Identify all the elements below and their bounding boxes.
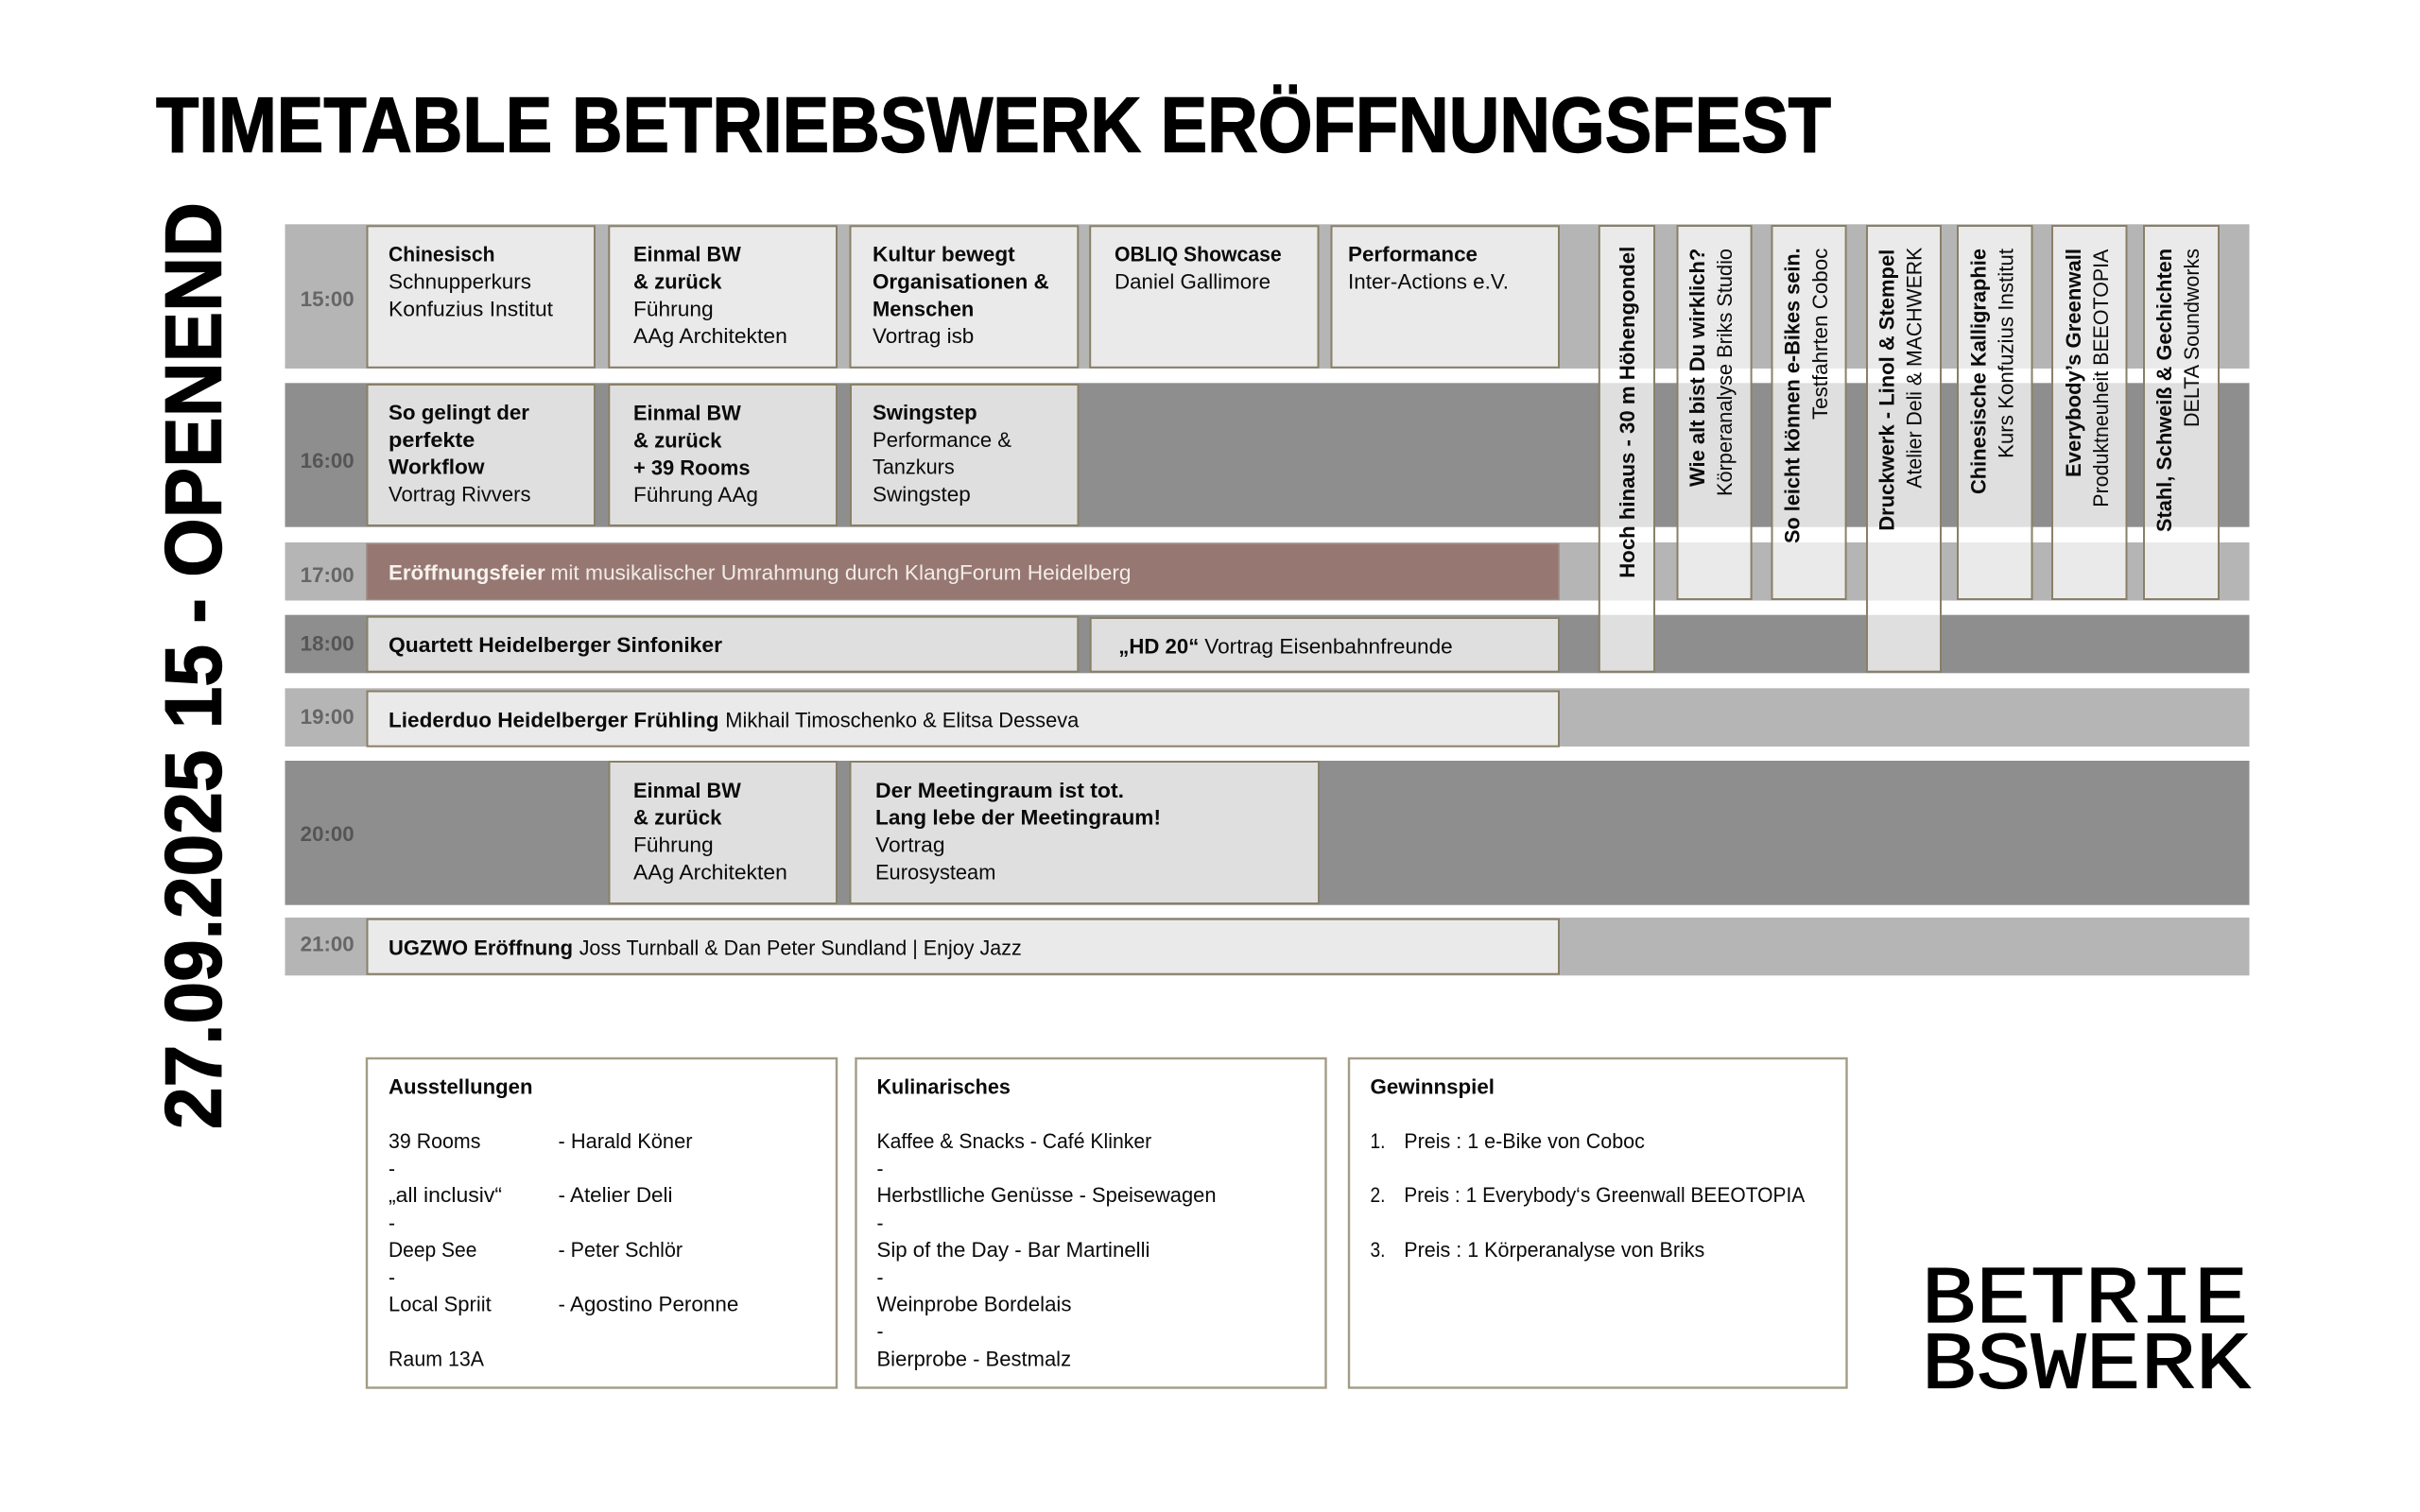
band 17:00 [285, 542, 2250, 601]
row: 17:00 [285, 542, 2250, 601]
card: Einmal BW: Führung [633, 297, 714, 320]
card: Kultur bewegt: Menschen [873, 297, 974, 320]
card: Eröffnungsfeier: mit musikalischer Umrahmung durch KlangForum Heidelberg [550, 560, 1131, 584]
exhibition list: 39 Rooms [389, 1129, 480, 1153]
card: Swingstep [851, 385, 1078, 525]
prize list: 3. [1371, 1238, 1386, 1262]
column: Stahl, Schweiß & Gechichten: Stahl, Schweiß & Gechichten [2152, 249, 2176, 532]
column: Chinesische Kalligraphie: Chinesische Kalligraphie [1966, 249, 1991, 494]
card: Einmal BW + 39 Rooms: + 39 Rooms [633, 455, 751, 479]
panel: Kulinarisches [856, 1058, 1325, 1387]
card: OBLIQ Showcase: Daniel Gallimore [1115, 270, 1270, 294]
column: Hoch hinaus [1599, 226, 1654, 672]
column: Druckwerk: Druckwerk - Linol & Stempel [1876, 249, 1899, 531]
column: So leicht können e-Bikes sein: So leicht können e-Bikes sein. [1781, 248, 1805, 543]
culinary list: - [877, 1157, 883, 1180]
card: So gelingt der perfekte Workflow [367, 385, 595, 525]
exhibition list: - Atelier Deli [558, 1183, 673, 1207]
band 18:00 [285, 615, 2250, 673]
band 15:00 [285, 224, 2250, 369]
card: Einmal BW: AAg Architekten [633, 324, 787, 348]
culinary list: Weinprobe Bordelais [877, 1292, 1072, 1315]
card: Einmal BW: & zurück [633, 270, 722, 294]
card: Liederduo [367, 692, 1559, 747]
card: OBLIQ Showcase [1090, 226, 1318, 368]
card: Der Meetingraum ist tot [851, 762, 1319, 903]
card: UGZWO [367, 919, 1559, 974]
card: So gelingt der perfekte Workflow: Vortrag Rivvers [389, 483, 531, 507]
card: Einmal BW + 39 Rooms: Einmal BW [633, 402, 742, 425]
card: So gelingt der perfekte Workflow: So gelingt der [389, 401, 529, 424]
culinary list: Kaffee & Snacks - Café Klinker [877, 1129, 1152, 1153]
column: Wie alt bist Du wirklich [1677, 226, 1752, 599]
logo: Betriebswerk [1921, 1254, 2251, 1412]
band 19:00 [285, 688, 2250, 747]
column: Druckwerk [1867, 226, 1941, 672]
card: Der Meetingraum ist tot: Eurosysteam [875, 860, 995, 884]
row: 21:00 [285, 918, 2250, 975]
logo: Betriebswerk: BSWERK [1921, 1319, 2251, 1412]
card: HD 20: Vortrag Eisenbahnfreunde [1204, 635, 1453, 659]
card: OBLIQ Showcase: OBLIQ Showcase [1115, 243, 1282, 266]
card: UGZWO: Joss Turnball & Dan Peter Sundland | Enjoy Jazz [579, 936, 1022, 960]
culinary list: - [877, 1265, 883, 1289]
card: Swingstep: Swingstep [873, 483, 971, 507]
heading: Kulinarisches: Kulinarisches [877, 1074, 1011, 1098]
band 21:00 [285, 918, 2250, 975]
card: Swingstep: Performance & [873, 428, 1011, 452]
card: Der Meetingraum ist tot: Vortrag [875, 833, 945, 857]
card: Liederduo: Mikhail Timoschenko & Elitsa Desseva [725, 708, 1080, 731]
exhibition list: - [389, 1157, 395, 1180]
exhibition list: Deep See [389, 1238, 476, 1262]
time 17:00: 17:00 [301, 563, 354, 587]
heading: Gewinnspiel: Gewinnspiel [1371, 1074, 1495, 1098]
column: Chinesische Kalligraphie: Kurs Konfuzius Institut [1995, 248, 2018, 458]
card: Kultur bewegt: Kultur bewegt [873, 243, 1015, 266]
card: Kultur bewegt: Organisationen & [873, 270, 1049, 294]
date heading vertical: 27.09.2025 15 - OPENEND [149, 202, 238, 1129]
card: Eröffnungsfeier [367, 544, 1559, 599]
card: So gelingt der perfekte Workflow: Workflow [389, 455, 485, 479]
prize list [1371, 1129, 1805, 1262]
prize list: 2. [1371, 1183, 1386, 1207]
exhibition list: - Harald Köner [558, 1129, 693, 1153]
time 19:00: 19:00 [301, 705, 354, 729]
card: Einmal BW 20:00: AAg Architekten [633, 860, 787, 884]
card: Einmal BW + 39 Rooms [609, 385, 837, 525]
card: Einmal BW + 39 Rooms: & zurück [633, 429, 722, 452]
card: Einmal BW 20:00: Führung [633, 833, 714, 857]
exhibition list: - Peter Schlör [558, 1238, 683, 1262]
culinary list: - [877, 1211, 883, 1234]
card: Liederduo: Liederduo Heidelberger Frühling [389, 708, 718, 731]
card: Kultur bewegt: Vortrag isb [873, 324, 974, 348]
card: Einmal BW 20:00 [609, 762, 837, 903]
column: Hoch hinaus: Hoch hinaus - 30 m Höhengondel [1616, 247, 1639, 578]
card: Performance: Inter-Actions e.V. [1348, 270, 1509, 294]
card: Der Meetingraum ist tot: Lang lebe der Meetingraum! [875, 806, 1161, 830]
card: Einmal BW 20:00: & zurück [633, 806, 722, 830]
card: Eröffnungsfeier: Eröffnungsfeier [389, 560, 545, 584]
card: Quartett Heidelberger Sinfoniker: Quartett Heidelberger Sinfoniker [389, 633, 722, 657]
time 21:00: 21:00 [301, 933, 354, 956]
exhibition list: - Agostino Peronne [558, 1292, 738, 1315]
culinary list: Bierprobe - Bestmalz [877, 1348, 1071, 1371]
column: Stahl, Schweiß & Gechichten [2144, 226, 2219, 599]
title: TIMETABLE BETRIEBSWERK ERÖFFNUNGSFEST [156, 81, 1831, 169]
prize list: Preis : 1 Everybody‘s Greenwall BEEOTOPIA [1404, 1183, 1805, 1207]
culinary list: Sip of the Day - Bar Martinelli [877, 1238, 1150, 1262]
heading: Ausstellungen: Ausstellungen [389, 1074, 533, 1098]
card: Einmal BW: Einmal BW [633, 243, 742, 266]
row: 20:00 [285, 761, 2250, 905]
row: 18:00 [285, 615, 2250, 673]
exhibition list: Local Spriit [389, 1292, 492, 1315]
time 15:00: 15:00 [301, 287, 354, 311]
card: Einmal BW [609, 226, 837, 368]
row: 16:00 [285, 383, 2250, 527]
card: Chinesisch: Konfuzius Institut [389, 297, 554, 320]
column: Druckwerk: Atelier Deli & MACHWERK [1903, 248, 1927, 489]
exhibition list: - [389, 1265, 395, 1289]
card: Performance [1331, 226, 1559, 368]
row: 15:00 [285, 224, 2250, 369]
card: Einmal BW 20:00: Einmal BW [633, 779, 742, 802]
card: HD 20: „HD 20“ [1118, 635, 1199, 659]
card: UGZWO: UGZWO Eröffnung [389, 936, 573, 960]
card: Quartett Heidelberger Sinfoniker [367, 617, 1078, 672]
time 20:00: 20:00 [301, 822, 354, 846]
column: Chinesische Kalligraphie [1958, 226, 2032, 599]
row: 19:00 [285, 688, 2250, 747]
exhibition list: - [389, 1211, 395, 1234]
card: Chinesisch: Chinesisch [389, 243, 495, 266]
prize list: 1. [1371, 1129, 1386, 1153]
column: So leicht können e-Bikes sein: Testfahrten Coboc [1808, 249, 1832, 420]
column: Stahl, Schweiß & Gechichten: DELTA Soundworks [2180, 249, 2204, 427]
card: HD 20 [1091, 618, 1559, 672]
time 18:00: 18:00 [301, 631, 354, 655]
column: Everybody's Greenwall [2052, 226, 2127, 599]
panel: Ausstellungen [367, 1058, 837, 1387]
card: Swingstep: Swingstep [873, 401, 977, 424]
column: Everybody's Greenwall: Everybody’s Greenwall [2062, 249, 2085, 477]
card: Chinesisch [367, 226, 595, 368]
culinary list: Herbstlliche Genüsse - Speisewagen [877, 1183, 1216, 1207]
panel: Gewinnspiel [1349, 1058, 1847, 1387]
time 16:00: 16:00 [301, 449, 354, 472]
culinary list [877, 1129, 1216, 1371]
card: Performance: Performance [1348, 243, 1478, 266]
column: So leicht können e-Bikes sein [1772, 226, 1846, 599]
card: Der Meetingraum ist tot: Der Meetingraum ist tot. [875, 779, 1124, 802]
column: Everybody's Greenwall: Produktneuheit BEEOTOPIA [2089, 249, 2113, 507]
card: Einmal BW + 39 Rooms: Führung AAg [633, 483, 758, 507]
card: Swingstep: Tanzkurs [873, 455, 955, 479]
column: Wie alt bist Du wirklich: Körperanalyse Briks Studio [1713, 249, 1737, 496]
card: So gelingt der perfekte Workflow: perfekte [389, 428, 475, 452]
card: Kultur bewegt [851, 226, 1078, 368]
exhibition list: „all inclusiv“ [389, 1183, 502, 1207]
logo: Betriebswerk: BETRIE [1921, 1254, 2248, 1347]
prize list: Preis : 1 e-Bike von Coboc [1404, 1129, 1645, 1153]
exhibition list [389, 1129, 738, 1371]
exhibition list: Raum 13A [389, 1348, 484, 1371]
band 20:00 [285, 761, 2250, 905]
card: Chinesisch: Schnupperkurs [389, 270, 531, 294]
prize list: Preis : 1 Körperanalyse von Briks [1404, 1238, 1704, 1262]
culinary list: - [877, 1319, 883, 1343]
band 16:00 [285, 383, 2250, 527]
column: Wie alt bist Du wirklich: Wie alt bist Du wirklich? [1685, 249, 1709, 487]
